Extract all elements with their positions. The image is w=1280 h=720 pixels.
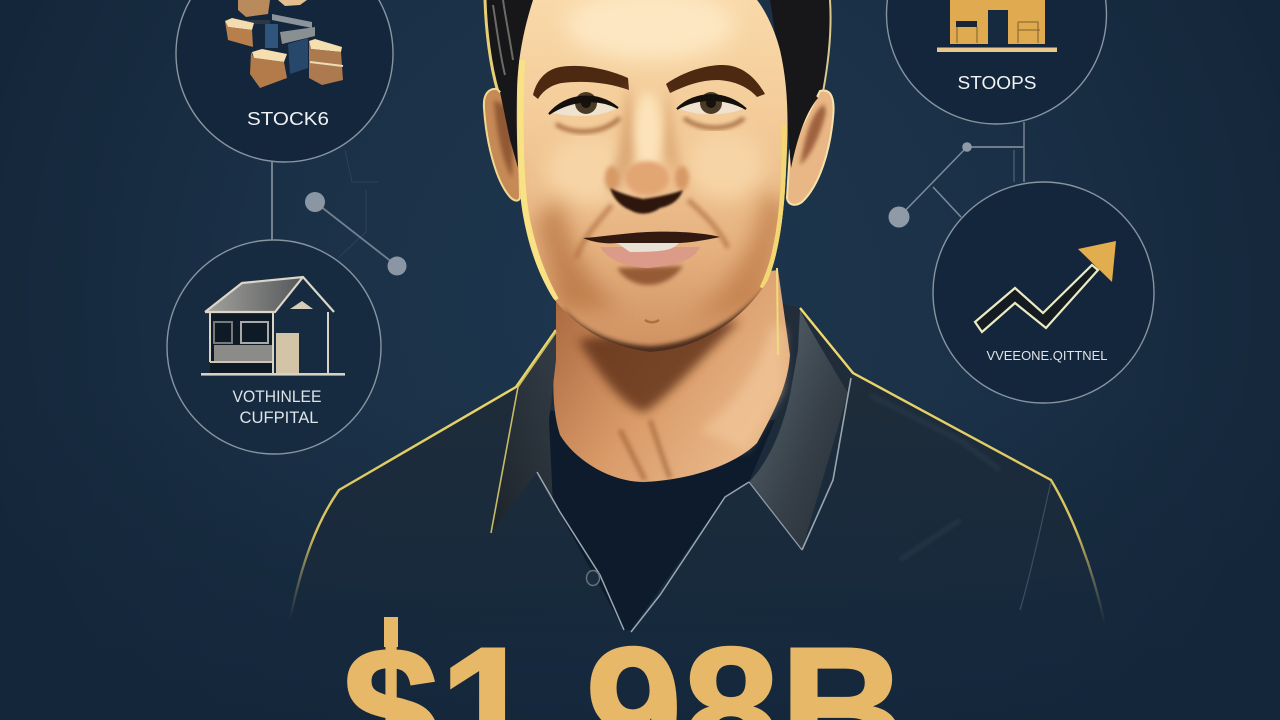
label: stocks: STOCK6 xyxy=(247,109,329,129)
forehead highlight xyxy=(565,0,735,60)
panel: growth circle right xyxy=(933,182,1154,403)
smile lines xyxy=(576,205,612,258)
portrait figure xyxy=(290,0,1104,632)
neck xyxy=(553,268,790,482)
icon: stacked boxes xyxy=(225,0,343,88)
rim highlights xyxy=(521,60,556,300)
icon: storefront xyxy=(937,0,1057,52)
eye left xyxy=(549,92,620,132)
label: venture capital xyxy=(232,388,322,427)
brows xyxy=(533,66,629,99)
label: venture capital: CUFPITAL xyxy=(240,409,318,427)
panel: venture capital circle bottom left xyxy=(167,240,381,454)
infographic canvas xyxy=(154,0,1155,720)
ear right xyxy=(782,60,834,205)
collar right xyxy=(631,310,851,632)
hair xyxy=(485,0,831,200)
nose xyxy=(605,80,690,214)
connector lines and nodes: right xyxy=(888,122,1024,228)
jaw shadow xyxy=(563,288,762,352)
eye right xyxy=(677,92,746,128)
face xyxy=(517,0,790,365)
shirt body xyxy=(290,300,1105,720)
chin dimple xyxy=(645,320,659,322)
label: stores: STOOPS xyxy=(958,73,1036,93)
collar left xyxy=(491,332,624,630)
t-shirt xyxy=(537,410,775,630)
cheek shading xyxy=(545,135,635,205)
mouth xyxy=(583,232,720,285)
shirt button xyxy=(586,570,600,586)
connector lines and nodes: left xyxy=(272,150,406,276)
panel: stores circle top right xyxy=(886,0,1106,124)
label: growth capital: VVEEONE.QITTNEL xyxy=(986,349,1108,363)
panel: stocks circle top left xyxy=(176,0,393,162)
icon: house xyxy=(201,277,345,376)
label: venture capital: VOTHINLEE xyxy=(232,388,322,406)
ear left xyxy=(484,85,521,201)
icon: rising arrow chart xyxy=(975,241,1116,332)
